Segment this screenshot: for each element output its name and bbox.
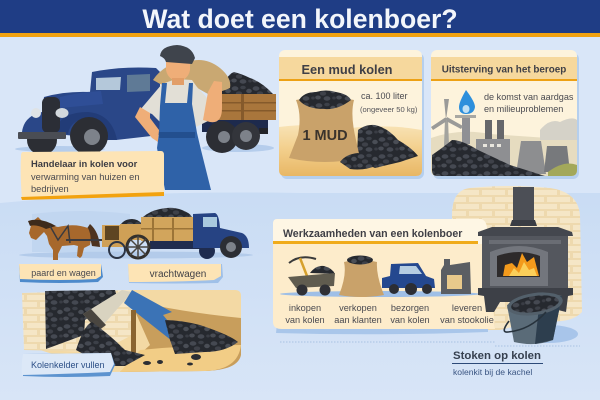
- callout: definition of a coal merchant: Handelaar in kolen voor: [31, 158, 138, 169]
- panel: een mud kolen: [279, 50, 424, 179]
- wagon wheels: [109, 236, 149, 258]
- task: verkopen: aan klanten: [334, 315, 382, 325]
- stove top: [478, 227, 573, 236]
- illustration: brick wall behind stove: [452, 186, 582, 330]
- burlap sack with coal: 1 MUD: [302, 128, 348, 144]
- truck cab and hood: [22, 68, 160, 140]
- panel heading: Een mud kolen: [301, 62, 393, 77]
- task: leveren: van stookolie: [440, 315, 494, 325]
- hand on hip arm: [135, 107, 159, 142]
- panel: uitsterving van het beroep: [431, 50, 579, 179]
- coal pile beside sack: [357, 125, 418, 168]
- stove body: [482, 236, 568, 292]
- truck cab: [193, 213, 249, 258]
- coal loads: [121, 208, 192, 224]
- truck radiator grille: [42, 97, 60, 133]
- stove door frame: [490, 246, 548, 286]
- truck wooden bed: [202, 94, 276, 134]
- cellar opening with coal: [45, 290, 118, 349]
- illustration: horse and wagon with delivery truck: [19, 208, 253, 260]
- task: leveren: leveren: [452, 303, 482, 313]
- label: vrachtwagen: vrachtwagen: [150, 269, 206, 280]
- icon: stove oil jerrycan: [441, 259, 471, 294]
- flat cap: [160, 45, 195, 64]
- callout: definition of a coal merchant: [21, 151, 164, 200]
- panel: werkzaamheden van een kolenboer: [273, 219, 495, 334]
- fire: [503, 253, 539, 276]
- panel: kolenkelder vullen: [22, 290, 241, 372]
- stove base: [478, 288, 573, 312]
- title banner: Wat doet een kolenboer?: [142, 4, 458, 34]
- wind turbine: [431, 99, 463, 146]
- illustration: coal stove: [478, 187, 578, 343]
- task labels: [285, 303, 494, 325]
- illustration: coal bucket: [504, 289, 564, 344]
- label: kolenkelder vullen: Kolenkelder vullen: [31, 360, 105, 370]
- panel heading: [273, 228, 478, 244]
- icon: mining cart with pickaxe: [288, 257, 335, 296]
- gas and environment text: en milieuproblemen: [484, 104, 563, 114]
- panel heading: [279, 57, 422, 81]
- label: paard en wagen: [19, 264, 103, 283]
- raised arm: [203, 81, 222, 122]
- blue metal chute: [124, 290, 192, 352]
- overalls: [157, 83, 211, 190]
- volume text: ca. 100 liter: [361, 91, 408, 101]
- gas flame icon: [455, 90, 476, 144]
- label: kolenkelder vullen: [22, 353, 115, 377]
- coal heaps: [165, 320, 238, 354]
- volume text: (ongeveer 50 kg): [360, 105, 418, 114]
- illustration: coal merchant with sack: [135, 45, 230, 190]
- truck rear wheels: [206, 121, 260, 153]
- label: vrachtwagen: [128, 264, 223, 284]
- hidden front wheel: [27, 125, 57, 155]
- wooden cargo box: [102, 217, 200, 249]
- hidden truck wheel: [199, 243, 215, 259]
- loose coal lumps: [340, 153, 378, 170]
- panel heading: [431, 57, 577, 81]
- callout: definition of a coal merchant: verwarming van huizen en: [31, 172, 140, 182]
- truck headlights: [31, 108, 68, 118]
- loose coal: [143, 354, 201, 366]
- icon: sack of coal: [339, 256, 384, 297]
- head: [166, 60, 190, 81]
- shirt: [140, 79, 210, 127]
- title banner: [0, 0, 600, 37]
- task: bezorgen: van kolen: [390, 315, 430, 325]
- truck load of coal: [219, 72, 273, 94]
- task: bezorgen: bezorgen: [391, 303, 429, 313]
- task: verkopen: verkopen: [339, 303, 377, 313]
- callout: definition of a coal merchant: bedrijven: [31, 184, 69, 194]
- brick wall: [22, 290, 132, 352]
- task: inkopen: inkopen: [289, 303, 321, 313]
- floor shadow: [518, 325, 578, 343]
- stovepipe: [513, 187, 534, 221]
- illustration: coal truck: [15, 68, 276, 155]
- icon: delivery pickup: [382, 263, 435, 295]
- gas and environment text: [484, 92, 574, 114]
- caption: stoken op kolen: kolenkit bij de kachel: [453, 367, 532, 377]
- burlap sack on shoulder: [153, 60, 230, 94]
- neck: [172, 78, 184, 85]
- gas and environment text: de komst van aardgas: [484, 92, 574, 102]
- task: inkopen: van kolen: [285, 315, 325, 325]
- truck front wheel: [70, 117, 108, 155]
- caption: stoken op kolen: [452, 350, 543, 377]
- panel heading: Werkzaamheden van een kolenboer: [283, 228, 462, 240]
- horse: [28, 217, 100, 260]
- label: paard en wagen: paard en wagen: [31, 268, 96, 278]
- burlap sack with coal: [289, 90, 360, 162]
- volume text: [360, 91, 418, 114]
- caption: stoken op kolen: Stoken op kolen: [453, 350, 541, 362]
- foreground coal heap: [432, 140, 545, 176]
- corrugated chute: [83, 290, 132, 331]
- factory and cooling towers: [476, 118, 577, 176]
- panel heading: Uitsterving van het beroep: [442, 64, 566, 76]
